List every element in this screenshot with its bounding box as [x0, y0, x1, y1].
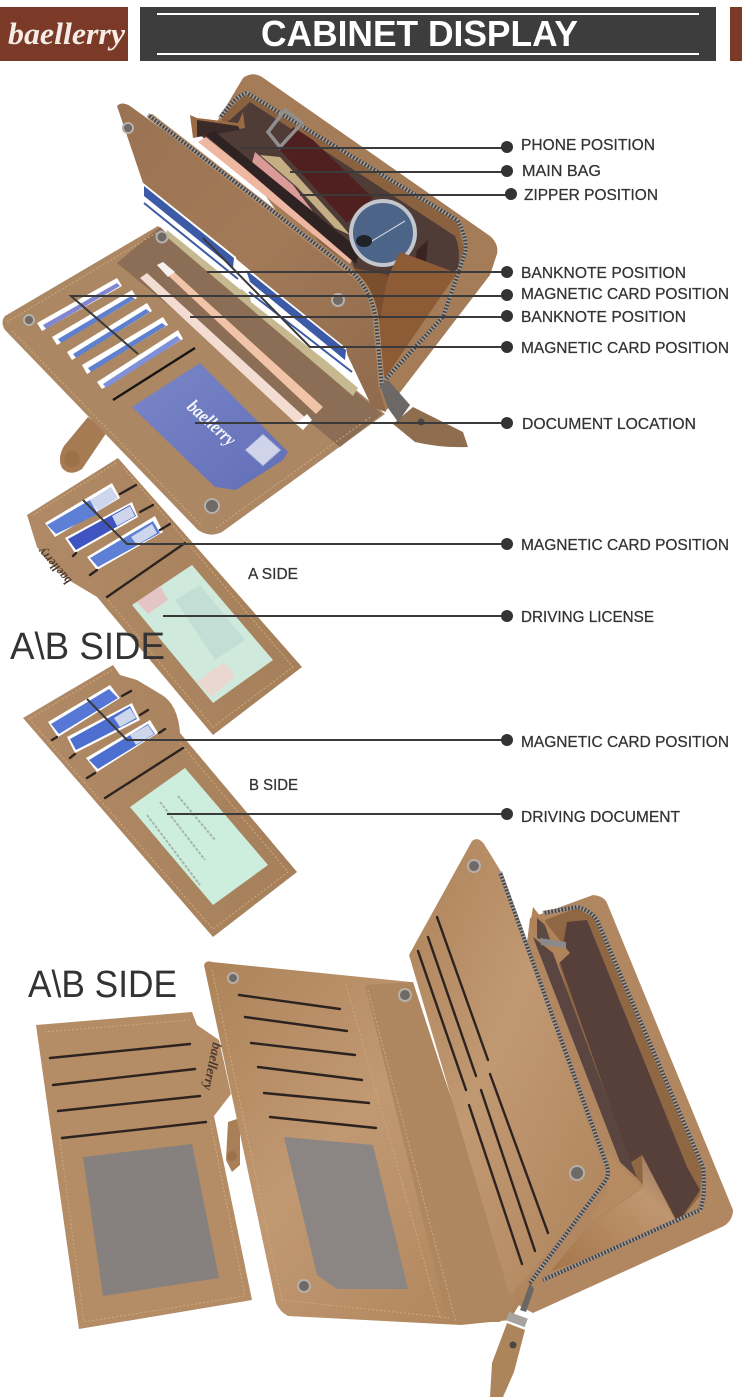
card 2	[65, 502, 138, 553]
tan inner tab	[530, 907, 570, 965]
header: brand logo: baellerry	[8, 16, 125, 51]
back shell	[215, 74, 497, 412]
card 1	[48, 685, 120, 737]
long slot	[113, 348, 195, 400]
leader: magnetic card position, flap: MAGNETIC CARD POSITION	[521, 340, 729, 357]
leader: main bag	[290, 163, 601, 180]
side labels: B SIDE	[249, 777, 298, 794]
left card slots	[37, 278, 183, 389]
snap buttons	[24, 123, 344, 513]
A side card	[27, 458, 302, 735]
window	[83, 1144, 219, 1296]
leader: driving license: DRIVING LICENSE	[521, 609, 654, 626]
beige strip under flap	[166, 225, 358, 396]
card 2	[67, 703, 140, 753]
slots	[73, 485, 170, 575]
leader: phone position	[240, 137, 655, 154]
icon: QR code	[245, 434, 281, 466]
inner zipper divider	[533, 937, 637, 1178]
bottom open wallet	[204, 839, 733, 1397]
card slots	[50, 1044, 206, 1138]
leader: banknote position, lower: BANKNOTE POSITION	[521, 309, 686, 326]
upper flap	[117, 104, 386, 412]
leader: main bag: MAIN BAG	[522, 163, 601, 180]
icon: watch strap	[280, 127, 373, 223]
header: title bar: CABINET DISPLAY	[261, 13, 578, 54]
metal puller	[540, 938, 566, 948]
header: brand logo	[0, 7, 128, 61]
button strap	[226, 1118, 240, 1172]
leader: magnetic card position, A side	[83, 500, 729, 554]
leader: magnetic card position, left slots	[71, 286, 729, 354]
leader: magnetic card position, flap	[203, 238, 729, 357]
back shell	[490, 895, 733, 1313]
dark interior lining	[560, 920, 700, 1223]
side labels: A SIDE	[248, 566, 298, 583]
blue cards in flap, left	[142, 182, 241, 290]
beige insert	[260, 155, 350, 235]
woven band inside zipper	[220, 93, 465, 382]
woven band inside zipper	[545, 908, 703, 1223]
header: title bar	[140, 7, 716, 61]
dark interior lining	[200, 102, 459, 340]
leader: banknote position, lower	[190, 309, 686, 326]
leader: zipper position	[300, 187, 658, 204]
document window card: baellerry	[183, 396, 240, 451]
card 3	[86, 720, 158, 772]
leader: driving document: DRIVING DOCUMENT	[521, 809, 680, 826]
heading: A\B side, second: A\B SIDE	[28, 964, 177, 1006]
banknotes strip	[140, 273, 310, 430]
slots	[52, 691, 165, 778]
logo: baellerry	[199, 1041, 224, 1092]
B side card	[23, 665, 297, 937]
pocket	[550, 1153, 677, 1272]
flap zipper	[500, 872, 608, 1283]
leader: magnetic card position, B side	[87, 699, 729, 751]
window	[284, 1137, 408, 1289]
flap slots	[418, 917, 548, 1264]
card 1	[45, 483, 120, 537]
inner corner pocket	[190, 112, 245, 138]
lower card panel	[2, 226, 385, 535]
driving license window	[132, 565, 273, 703]
phone edge	[198, 137, 354, 264]
side labels	[248, 566, 298, 794]
document window card	[132, 363, 288, 490]
header: right accent block	[730, 7, 742, 61]
card slots	[239, 995, 376, 1128]
blue cards in flap, right	[244, 266, 353, 382]
left panel	[204, 961, 522, 1325]
flap zipper	[148, 115, 382, 388]
leader: banknote position	[207, 265, 686, 282]
panel stitching	[7, 232, 372, 528]
leader: banknote position: BANKNOTE POSITION	[521, 265, 686, 282]
icon: watch face	[349, 199, 417, 267]
zipper pull tab	[490, 1283, 534, 1397]
card 3	[87, 516, 163, 570]
heading: A\B side, first: A\B SIDE	[10, 626, 165, 668]
leader: zipper position: ZIPPER POSITION	[524, 187, 658, 204]
leader: phone position: PHONE POSITION	[521, 137, 655, 154]
icon: watch buckle	[268, 110, 302, 147]
logo on card: baellerry	[34, 545, 74, 588]
leader: magnetic card position, left slots: MAGNETIC CARD POSITION	[521, 286, 729, 303]
darker centre pocket	[117, 227, 382, 447]
document text	[147, 796, 215, 885]
raised flap	[409, 839, 606, 1296]
snap buttons	[228, 973, 238, 983]
back zipper	[543, 907, 704, 1280]
strap with snap	[60, 417, 107, 473]
zipper pull	[380, 380, 468, 447]
front pocket	[378, 252, 457, 378]
leader: driving document	[167, 808, 680, 826]
top wallet photo	[2, 74, 497, 535]
leader: document location	[195, 416, 696, 433]
leader: document location: DOCUMENT LOCATION	[522, 416, 696, 433]
leader: magnetic card position, B side: MAGNETIC CARD POSITION	[521, 734, 729, 751]
banknote in main bag	[252, 152, 317, 217]
dark inner seam	[206, 131, 360, 264]
middle darker strip	[365, 982, 517, 1322]
back zipper	[220, 93, 466, 382]
leader: driving license	[163, 609, 654, 626]
leader: magnetic card position, A side: MAGNETIC CARD POSITION	[521, 537, 729, 554]
bottom left card	[36, 1012, 252, 1329]
driving document window	[130, 768, 268, 905]
